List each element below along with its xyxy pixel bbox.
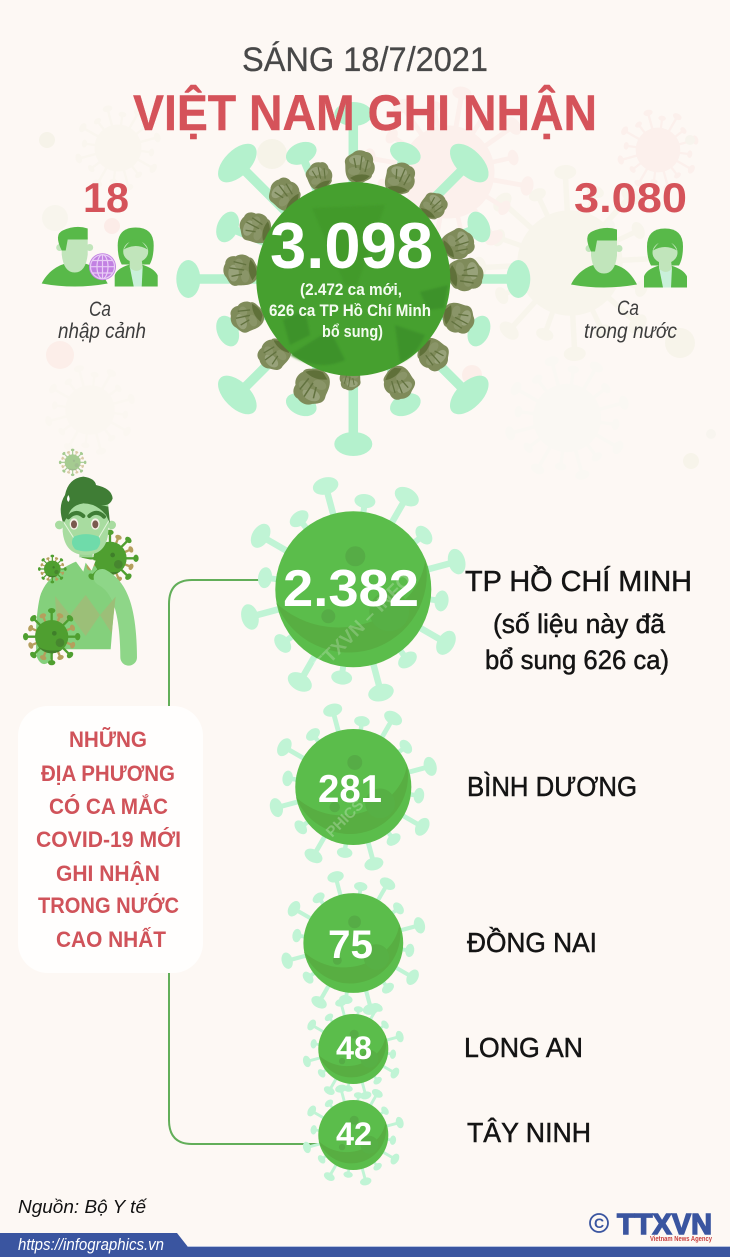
label: Dong Nai: ĐỒNG NAI	[467, 927, 597, 958]
imported cases caption	[58, 298, 146, 343]
virus: Binh Duong: PHICS	[323, 796, 367, 841]
illustration: sweater torso	[36, 562, 115, 664]
illustration: virus on arm	[23, 608, 80, 665]
illustration: neck and collar	[79, 550, 93, 557]
main total number: 3.098	[270, 209, 433, 282]
virus: Ho Chi Minh City: TTXVN – INFO	[311, 570, 417, 676]
connector line	[169, 580, 330, 1144]
label: Binh Duong: BÌNH DƯƠNG	[467, 771, 637, 802]
title: main heading: VIỆT NAM GHI NHẬN	[133, 85, 597, 141]
main total note	[269, 281, 431, 341]
virus: Binh Duong	[268, 701, 439, 873]
illustration: masked person surrounded by viruses	[23, 449, 139, 665]
background: faint virus pattern	[39, 57, 716, 481]
virus: Dong Nai: 75	[328, 923, 373, 967]
callout: localities with highest new domestic cases: ĐỊA PHƯƠNG	[41, 761, 175, 786]
main total note: (2.472 ca mới,	[300, 281, 402, 299]
virus: Ho Chi Minh City	[238, 474, 468, 704]
footer bar with website	[0, 1233, 730, 1257]
main total note: bổ sung)	[322, 323, 383, 341]
virus: Long An	[302, 997, 405, 1101]
domestic cases number: 3.080	[574, 174, 687, 221]
main total note: 626 ca TP Hồ Chí Minh	[269, 302, 431, 320]
label: Ho Chi Minh City: bổ sung 626 ca)	[485, 645, 669, 675]
callout: localities with highest new domestic cases: COVID-19 MỚI	[36, 827, 181, 852]
imported cases caption: Ca	[89, 298, 111, 321]
logo: TTXVN: Vietnam News Agency	[650, 1236, 712, 1243]
virus: Long An: 48	[336, 1030, 372, 1066]
imported cases number: 18	[83, 174, 129, 221]
callout: localities with highest new domestic cases: NHỮNG	[69, 727, 147, 752]
illustration: shoulder virus	[81, 530, 139, 587]
virus: Binh Duong: 281	[318, 768, 382, 811]
callout: localities with highest new domestic cases: CAO NHẤT	[56, 927, 167, 952]
domestic cases caption: Ca	[617, 297, 639, 320]
illustration: hair	[61, 477, 113, 523]
label: Long An: LONG AN	[464, 1032, 583, 1063]
imported cases caption: nhập cảnh	[58, 320, 146, 343]
virus: Dong Nai	[280, 869, 427, 1017]
illustration: sweater arm	[102, 577, 129, 657]
illustration: small virus on shoulder	[38, 555, 67, 583]
illustration: face mask	[63, 522, 108, 538]
domestic cases caption	[584, 297, 677, 343]
virus: Ho Chi Minh City: 2.382	[283, 560, 419, 618]
callout: localities with highest new domestic cases: CÓ CA MẮC	[49, 794, 168, 819]
illustration: top pale virus	[59, 449, 86, 476]
footer bar with website: https://infographics.vn	[18, 1235, 164, 1254]
source: Nguồn: Bộ Y tế	[18, 1197, 148, 1217]
illustration: sweater pattern	[55, 595, 116, 636]
label: Ho Chi Minh City: (số liệu này đã	[493, 609, 666, 639]
logo: TTXVN: TTXVN	[617, 1209, 712, 1241]
logo: TTXVN: C	[594, 1215, 604, 1231]
callout: localities with highest new domestic cases: TRONG NƯỚC	[38, 893, 179, 918]
illustration: sweat drop	[67, 495, 70, 502]
main virus	[176, 102, 530, 456]
label: Ho Chi Minh City	[465, 564, 692, 675]
icon: imported cases people with globe	[42, 227, 158, 286]
illustration: head	[55, 521, 64, 529]
virus: Tay Ninh	[302, 1083, 405, 1187]
virus: Tay Ninh: 42	[336, 1116, 372, 1152]
illustration: eyebrows	[68, 513, 83, 517]
domestic cases caption: trong nước	[584, 320, 677, 343]
illustration: eyes	[70, 518, 78, 530]
callout: localities with highest new domestic cases	[18, 706, 203, 973]
callout: localities with highest new domestic cases: GHI NHẬN	[56, 861, 160, 886]
title: date line: SÁNG 18/7/2021	[242, 41, 488, 79]
label: Ho Chi Minh City: TP HỒ CHÍ MINH	[465, 564, 692, 598]
label: Tay Ninh: TÂY NINH	[467, 1117, 591, 1148]
icon: domestic cases people	[571, 228, 687, 288]
